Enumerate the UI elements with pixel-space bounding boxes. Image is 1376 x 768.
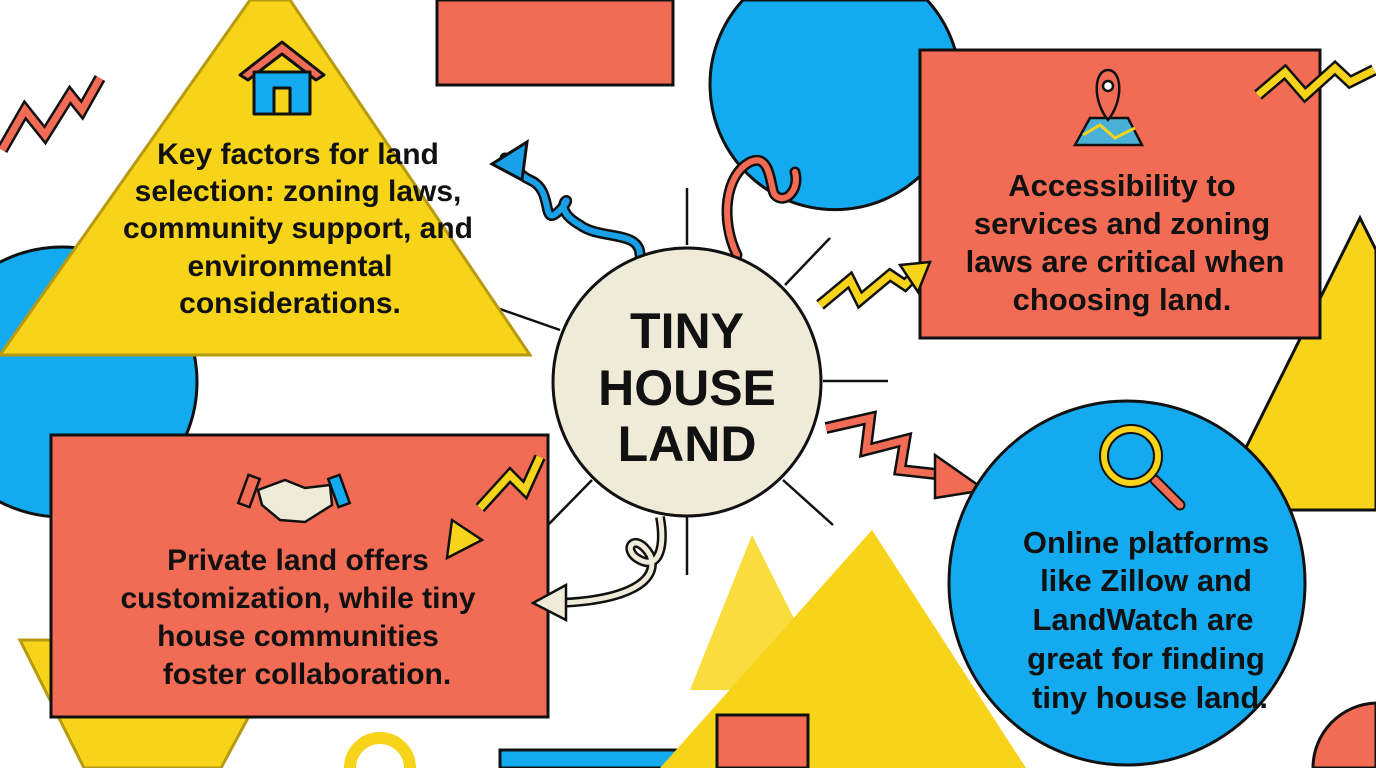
icon: house: [240, 42, 324, 114]
arrow: yellow zigzag into right panel: [820, 262, 930, 305]
title: center circle: LAND: [618, 416, 756, 472]
decorative rays: [480, 188, 888, 575]
icon: map pin: [1075, 70, 1142, 145]
icon: magnifier: [1104, 429, 1180, 505]
text: private land: customization, while tiny: [120, 582, 476, 615]
shape: red rect top: [437, 0, 673, 85]
text: private land: foster collaboration.: [163, 658, 451, 691]
shape: blue rect bottom: [500, 750, 700, 768]
arrow: cream loop to bottom-left panel: [533, 517, 662, 620]
arrow: red hook to top circle: [727, 160, 796, 255]
text: online platforms: great for finding: [1027, 641, 1265, 676]
shape: red circle bottom right: [1313, 703, 1376, 768]
shape: red rect bottom: [717, 715, 808, 768]
panel: bottom-right blue ellipse: [949, 401, 1305, 765]
shape: yellow triangle right: [1215, 218, 1376, 510]
shape: yellow inverted triangle bottom left: [20, 640, 290, 768]
shape: yellow triangles bottom: [660, 530, 1026, 768]
shape: blue circle top: [710, 0, 960, 210]
panel: top-left triangle: [0, 0, 530, 355]
text: private land: house communities: [157, 620, 439, 653]
text: key factors: community support, and: [123, 212, 473, 245]
arrow: blue squiggle to triangle: [492, 142, 640, 255]
text: key factors: considerations.: [179, 287, 401, 320]
arrow: red zigzag to blue ellipse: [826, 418, 985, 498]
text: accessibility: choosing land.: [1013, 282, 1231, 317]
icon: handshake: [238, 475, 350, 522]
arrow: yellow zigzag down-left: [447, 457, 540, 558]
text: accessibility: laws are critical when: [966, 244, 1284, 279]
title: center circle: [553, 248, 821, 516]
text: key factors: Key factors for land: [157, 138, 439, 171]
arrow: red zigzag top-left: [2, 78, 100, 150]
text: accessibility: services and zoning: [974, 206, 1270, 241]
text: online platforms: like Zillow and: [1040, 563, 1252, 598]
text: accessibility: Accessibility to: [1008, 168, 1236, 203]
shape: yellow ring bottom: [350, 738, 410, 768]
text: online platforms: tiny house land.: [1032, 680, 1268, 715]
text: private land: Private land offers: [167, 544, 429, 577]
shape: blue circle left: [0, 247, 197, 517]
arrow: yellow zigzag top-right: [1258, 68, 1374, 95]
text: key factors: environmental: [187, 250, 393, 283]
title: center circle: TINY: [630, 303, 744, 359]
text: key factors: selection: zoning laws,: [135, 175, 461, 208]
title: center circle: HOUSE: [598, 360, 776, 416]
panel: top-right red rectangle: [920, 50, 1320, 338]
text: online platforms: LandWatch are: [1032, 602, 1254, 637]
text: online platforms: Online platforms: [1023, 525, 1269, 560]
panel: bottom-left red rectangle: [51, 435, 548, 717]
